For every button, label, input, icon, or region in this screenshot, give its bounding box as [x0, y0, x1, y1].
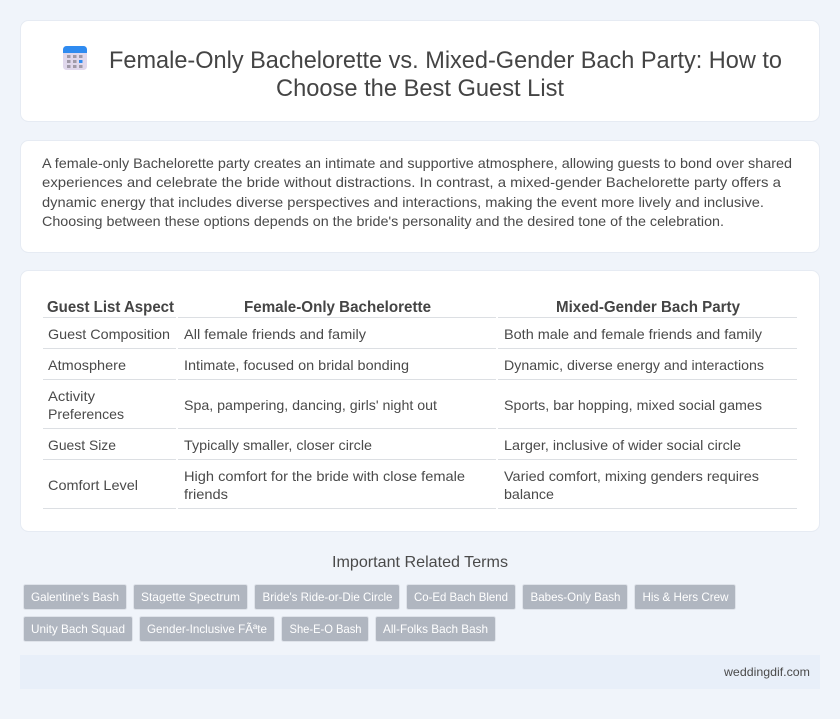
tag	[134, 584, 248, 610]
row: guest composition: Both male and female friends and family	[504, 326, 762, 342]
table header row: Mixed-Gender Bach Party	[556, 299, 740, 316]
footer bar	[20, 655, 820, 689]
tag: Stagette Spectrum	[141, 590, 240, 604]
tag: His & Hers Crew	[642, 590, 729, 604]
row: activity preferences: Sports, bar hopping, mixed social games	[504, 397, 762, 413]
row: guest size: Typically smaller, closer circle	[184, 437, 372, 453]
title	[109, 47, 782, 102]
intro text: Choosing between these options depends on the bride's personality and the desired tone of the celebration.	[42, 213, 724, 229]
row: guest size: Larger, inclusive of wider social circle	[504, 437, 741, 453]
tag: Gender-Inclusive FÃªte	[147, 622, 267, 636]
row: guest composition: Guest Composition	[48, 326, 170, 342]
row: activity preferences: Preferences	[48, 406, 124, 422]
row: activity preferences: Activity	[48, 388, 95, 404]
title: Choose the Best Guest List	[276, 75, 564, 102]
intro text	[42, 155, 792, 229]
tag	[254, 584, 400, 610]
tag: Unity Bach Squad	[31, 622, 125, 636]
panel: comparison table	[20, 270, 820, 532]
tag	[376, 616, 496, 642]
tag	[522, 584, 628, 610]
row: atmosphere: Intimate, focused on bridal bonding	[184, 357, 409, 373]
row: comfort level: balance	[504, 486, 554, 502]
row: comfort level: High comfort for the bride with close female	[184, 468, 465, 484]
row: comfort level: Varied comfort, mixing genders requires	[504, 468, 759, 484]
tag: All-Folks Bach Bash	[383, 622, 488, 636]
tag	[634, 584, 736, 610]
intro text: dynamic energy that includes diverse perspectives and interactions, making the event more lively and inclusive.	[42, 194, 764, 210]
panel: introduction	[20, 140, 820, 252]
tag: Galentine's Bash	[31, 590, 119, 604]
row: comfort level	[43, 468, 797, 509]
tag: Co-Ed Bach Blend	[414, 590, 508, 604]
panel: title header	[20, 20, 820, 122]
tag	[282, 616, 368, 642]
table header row	[43, 299, 797, 318]
tag: Bride's Ride-or-Die Circle	[262, 590, 393, 604]
row: atmosphere: Atmosphere	[48, 357, 126, 373]
row: guest size: Guest Size	[48, 437, 116, 453]
row: atmosphere	[43, 357, 797, 380]
intro text: experiences and celebrate the bride without distractions. In contrast, a mixed-gender Bachelorette party offers a	[42, 174, 781, 190]
tag	[24, 616, 132, 642]
table header row: Female-Only Bachelorette	[244, 299, 431, 316]
table header row: Guest List Aspect	[47, 299, 175, 316]
tag	[140, 616, 274, 642]
heading: important related terms: Important Related Terms	[332, 554, 508, 571]
row: activity preferences: Spa, pampering, dancing, girls' night out	[184, 397, 437, 413]
icon: calendar	[63, 46, 87, 70]
related term tags	[24, 584, 736, 642]
tag: Babes-Only Bash	[530, 590, 620, 604]
row: guest composition: All female friends and family	[184, 326, 366, 342]
intro text: A female-only Bachelorette party creates an intimate and supportive atmosphere, allowing guests to bond over shared	[42, 155, 792, 171]
row: comfort level: friends	[184, 486, 228, 502]
row: comfort level: Comfort Level	[48, 477, 138, 493]
row: guest composition	[43, 326, 797, 349]
tag: She-E-O Bash	[290, 622, 362, 636]
row: atmosphere: Dynamic, diverse energy and interactions	[504, 357, 764, 373]
title: Female-Only Bachelorette vs. Mixed-Gender Bach Party: How to	[109, 47, 782, 74]
tag	[406, 584, 516, 610]
row: guest size	[43, 437, 797, 460]
footer source text: weddingdif.com	[723, 665, 810, 679]
row: activity preferences	[43, 388, 797, 429]
tag	[24, 584, 126, 610]
